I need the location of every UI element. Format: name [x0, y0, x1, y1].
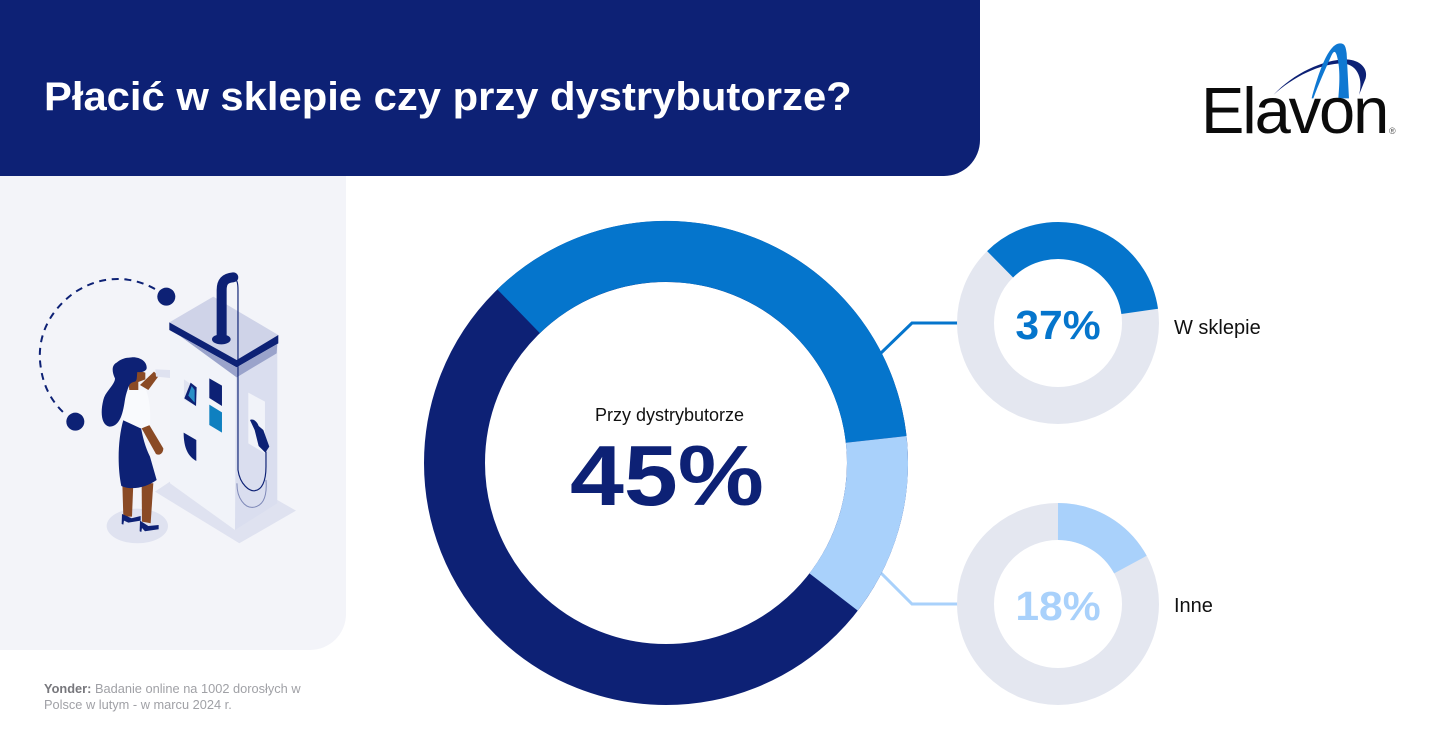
woman: [102, 357, 170, 543]
main value 45%: 45%: [570, 429, 764, 524]
Elavon logo: [1201, 43, 1396, 147]
donut: W sklepie 37%: [976, 240, 1140, 406]
fuel pump: [155, 277, 296, 543]
logo arcs: [1274, 43, 1366, 98]
source note: Polsce w lutym - w marcu 2024 r.: [44, 697, 232, 712]
illustration panel: [0, 176, 346, 650]
header banner: [0, 0, 980, 176]
value 18%: 18%: [1015, 583, 1101, 629]
value 37%: 37%: [1015, 302, 1101, 348]
main label: Przy dystrybutorze: [595, 405, 744, 425]
dashed arc with dots: [40, 279, 175, 431]
source note: Yonder: Badanie online na 1002 dorosłych w: [44, 681, 301, 696]
connector: Inne: [881, 573, 960, 604]
connector: W sklepie: [881, 323, 960, 353]
source note: [44, 681, 301, 712]
donut: Inne 18%: [976, 522, 1140, 686]
main donut chart: [454, 251, 878, 674]
title: Płacić w sklepie czy przy dystrybutorze?: [44, 75, 852, 119]
label W sklepie: W sklepie: [1174, 317, 1261, 339]
illustration: woman paying at fuel pump: [38, 272, 296, 544]
label Inne: Inne: [1174, 595, 1213, 617]
logo wordmark: Elavon: [1201, 74, 1387, 147]
registered mark: ®: [1389, 126, 1396, 136]
